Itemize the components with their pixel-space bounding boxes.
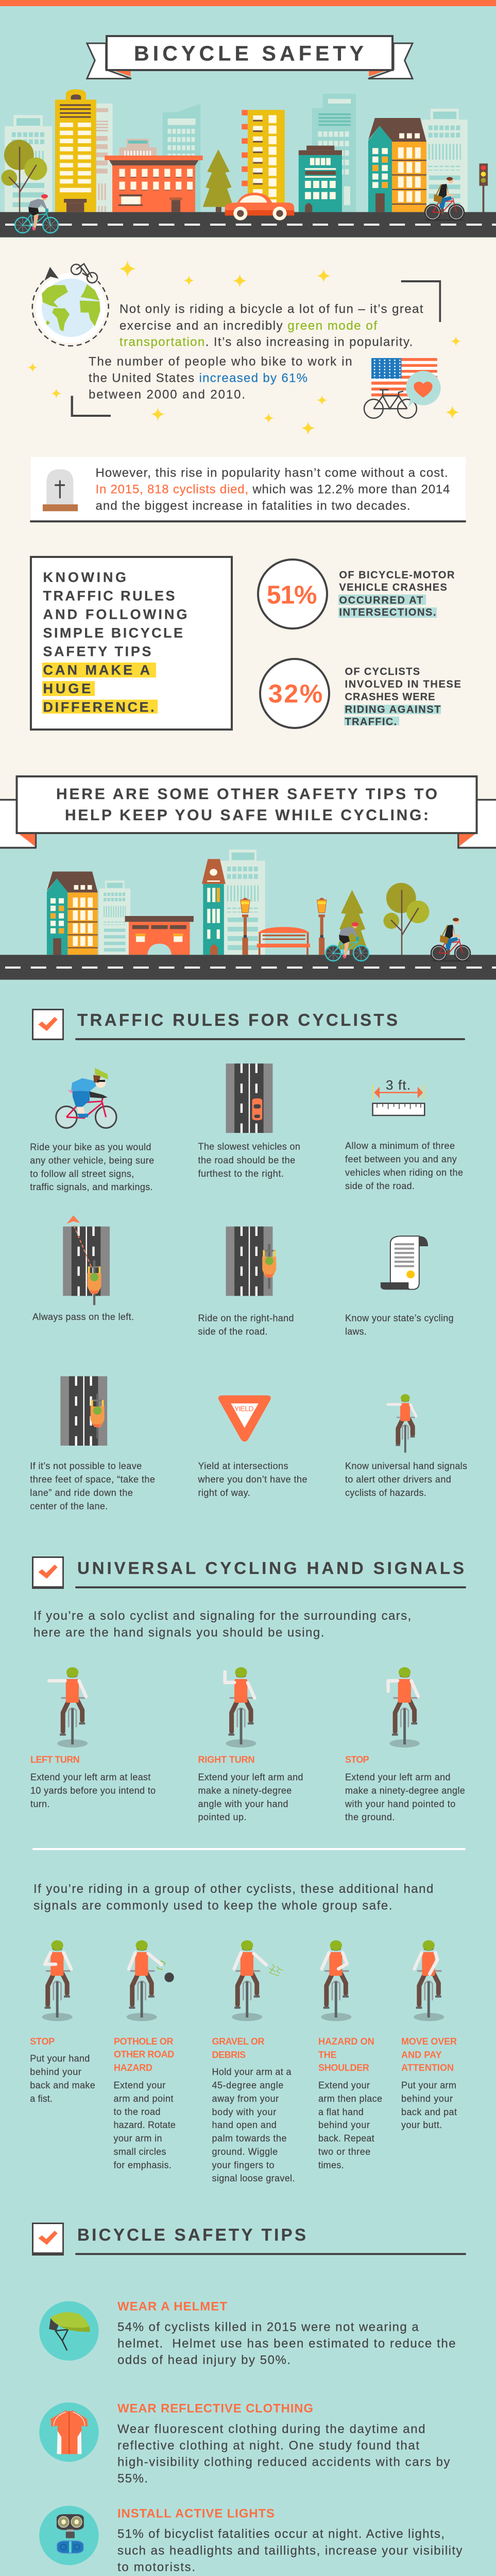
group signal: pothole: small circles [113,2147,166,2157]
bench [257,927,310,955]
group signal: gravel: away from your [212,2094,279,2104]
tip text [117,2507,463,2574]
building: teal with brown top [299,146,342,212]
figure: move over [414,1940,444,2021]
fatalities text: and the biggest increase in fatalities in two decades. [96,499,410,513]
signal: left turn text: turn. [30,1799,49,1809]
fatalities text: However, this rise in popularity hasn’t come without a cost. [96,466,448,480]
group signal: move over: AND PAY [401,2049,442,2060]
section heading [32,2223,466,2256]
highlight [338,595,437,618]
rule text row one: traffic signals, and markings. [30,1182,153,1192]
group signal: gravel: 45-degree angle [212,2080,283,2091]
statement text: DIFFERENCE. [43,699,155,715]
rule text row three: cyclists of hazards. [345,1488,426,1498]
rule text row three: If it’s not possible to leave [30,1461,142,1471]
stat caption: VEHICLE CRASHES [339,582,447,593]
group signal: move over: Put your arm [401,2080,456,2091]
tree: left [1,140,47,212]
group signal: gravel: hand open and [212,2120,277,2130]
ribbon tails [87,43,413,79]
signal: stop text: the ground. [345,1812,395,1822]
tip: helmet [39,2299,456,2367]
sparkles [27,260,461,435]
group signal: hazard on the shoulder [318,2036,382,2171]
highlight [344,705,441,725]
group signal: gravel: GRAVEL OR [212,2036,265,2046]
highlight bars [42,663,158,714]
figure: pothole [127,1940,174,2021]
road [0,955,496,980]
tip text: helmet. Helmet use has been estimated to reduce the [117,2337,456,2351]
rule text row one: feet between you and any [345,1154,457,1164]
icon: yield sign [218,1395,271,1442]
cyclist: red bike [424,177,465,221]
building: teal and orange house [368,118,426,212]
icon: riding on right-hand side [226,1227,276,1296]
rule text row three: Yield at intersections [198,1461,288,1471]
group signal: pothole: hazard. Rotate [113,2120,176,2130]
group signal: pothole: your arm in [113,2133,162,2144]
group signal: stop: behind your [30,2067,81,2077]
stat caption [339,569,455,618]
signal: stop text: make a ninety-degree angle [345,1786,465,1796]
signal: right turn text [198,1755,303,1822]
figure: stop [388,1667,420,1748]
rule text row two: Ride on the right-hand [198,1313,294,1324]
group signal: pothole [113,2036,176,2171]
intro panel [27,260,461,435]
label: three feet: 3 ft. [386,1077,411,1093]
signal: left turn text: LEFT TURN [30,1755,80,1765]
street lamp [317,897,327,955]
building: clock tower [202,859,226,955]
yield sign label: YIELD [234,1404,253,1413]
tip text: reflective clothing at night. One study found that [117,2439,419,2453]
building: pink rooftop [119,139,157,156]
group signal figures [42,1940,444,2021]
road [0,212,496,238]
group signal: pothole: HAZARD [114,2063,152,2073]
building: orange brick [105,156,203,212]
group signal: hazard on the shoulder: arm then place [318,2094,382,2104]
tip text: Wear fluorescent clothing during the daytime and [117,2422,425,2436]
group signal: move over: MOVE OVER [401,2036,457,2046]
signal: right turn text: RIGHT TURN [198,1755,254,1765]
icon: hand signal [388,1394,416,1453]
group signal: stop: back and make [30,2080,95,2091]
icon: taking the lane [60,1376,107,1446]
group signal: stop: STOP [30,2036,55,2046]
rule text row one: The slowest vehicles on [198,1142,300,1152]
rule text row three: where you don’t have the [198,1475,307,1485]
group signal: pothole: arm and point [113,2094,173,2104]
section heading: TRAFFIC RULES FOR CYCLISTS [77,1010,398,1029]
tip text: to motorists. [117,2560,195,2574]
stat: 51 percent [258,560,455,629]
rule text row two: Know your state’s cycling [345,1313,454,1324]
signal: stop text: STOP [345,1755,369,1765]
tip text: 55%. [117,2472,148,2486]
stat caption: OF BICYCLE-MOTOR [339,569,455,581]
building: teal tall back [312,94,356,212]
section heading: BICYCLE SAFETY TIPS [77,2225,306,2244]
stat caption: OF CYCLISTS [345,666,420,677]
stat circle [258,560,327,629]
statement text: SIMPLE BICYCLE [43,625,183,640]
rule text row two: Always pass on the left. [32,1312,134,1322]
rule text row one: any other vehicle, being sure [30,1155,154,1165]
rule text row one: Ride your bike as you would [30,1142,151,1152]
group signal: move over: your butt. [401,2120,442,2130]
rule icons row one [56,1063,428,1305]
statement text: CAN MAKE A [43,663,150,678]
group signal: hazard on the shoulder: times. [318,2160,344,2171]
building: pale right tower [422,109,468,212]
building: pale left tower [5,115,52,212]
car [225,193,294,221]
icon: three feet ruler [373,1084,424,1115]
figure: stop [42,1940,73,2021]
corner brackets [71,280,441,417]
section: traffic rules for cyclists [30,1009,467,1512]
intro text: the United States increased by 61% [89,371,307,385]
signal: left turn text [30,1755,156,1809]
signal: stop text [345,1755,465,1822]
figure: right turn [225,1667,256,1748]
stat caption: RIDING AGAINST [345,704,441,715]
tree: right [383,883,429,955]
icon: globe with bicycle orbit [32,262,109,346]
building: pale tower behind yellow [96,104,113,212]
rule text row two: laws. [345,1327,367,1337]
building: tall yellow tower [55,89,96,212]
ribbon tails [0,799,496,849]
signal: right turn text: make a ninety-degree [198,1786,292,1796]
rule text row three [30,1461,467,1512]
rule text row one: to follow all street signs, [30,1168,134,1179]
group signal: stop [30,2036,95,2104]
banner heading [56,786,437,824]
rule text row three: three feet of space, “take the [30,1475,155,1485]
stat caption: OCCURRED AT [339,595,423,606]
group intro: If you’re riding in a group of other cyclists, these additional hand [33,1882,433,1896]
icon: bike lights [39,2506,99,2565]
group signal: hazard on the shoulder: Extend your [318,2080,370,2091]
tip text: INSTALL ACTIVE LIGHTS [117,2507,275,2521]
fatalities text [96,466,450,513]
group signal: move over: behind your [401,2094,453,2104]
signal: right turn text: angle with your hand [198,1799,288,1809]
hero city skyline [0,89,496,238]
icon: road with car on the right [226,1063,272,1133]
tree: pine [337,890,367,955]
rule text row three: to alert other drivers and [345,1475,451,1485]
group signal: gravel: body with your [212,2107,276,2117]
section heading [32,1009,465,1040]
group signal: hazard on the shoulder: THE [318,2049,337,2060]
tip text: 51% of bicyclist fatalities occur at night. Active lights, [117,2527,444,2541]
rule text row three: lane” and ride down the [30,1488,133,1498]
group signal: hazard on the shoulder: two or three [318,2147,370,2157]
statement text: HUGE [43,681,91,697]
banner heading: HELP KEEP YOU SAFE WHILE CYCLING: [65,807,429,824]
rule text row one: furthest to the right. [198,1168,284,1179]
group intro: signals are commonly used to keep the whole group safe. [33,1899,392,1912]
solo signal figures [49,1667,420,1748]
icon: passing on the left [63,1215,110,1305]
section: bicycle safety tips [32,2223,466,2574]
group signal: pothole: Extend your [113,2080,165,2091]
stat: 32 percent [260,659,461,728]
stat circle [260,659,329,728]
figure: hazard on the shoulder [321,1940,351,2021]
rule text row one: Allow a minimum of three [345,1141,455,1151]
cyclist: teal bike [15,194,58,233]
street lamp [241,897,250,955]
building: yellow mid tower [242,110,285,212]
intro text: The number of people who bike to work in [89,354,352,368]
group signal: hazard on the shoulder: behind your [318,2120,370,2130]
group signal: hazard on the shoulder: SHOULDER [318,2063,369,2073]
statement text [43,569,187,715]
stat value: 51% [267,580,317,609]
cyclist: teal bike [326,922,369,961]
stat value: 32% [268,679,322,708]
second ribbon banner [0,776,496,849]
signal: stop text: Extend your left arm and [345,1772,450,1783]
group signal: move over: back and pat [401,2107,457,2117]
tip text: odds of head injury by 50%. [117,2353,290,2367]
intro text: between 2000 and 2010. [89,387,245,401]
group signal: hazard on the shoulder: a flat hand [318,2107,364,2117]
group signal: gravel: signal loose gravel. [212,2173,295,2183]
group signal: pothole: POTHOLE OR [114,2036,173,2046]
group signal: pothole: OTHER ROAD [114,2049,174,2060]
tip text: high-visibility clothing reduced accidents with cars by [117,2455,450,2469]
statement text: TRAFFIC RULES [43,588,175,603]
building: tall pale tower [220,850,265,955]
rule icons row three [60,1376,416,1453]
group signal: gravel: your fingers to [212,2160,274,2171]
rule text row two [32,1312,454,1337]
icon: flag with bike and heart [364,358,441,418]
rule text row three: right of way. [198,1488,250,1498]
title: BICYCLE SAFETY [134,41,364,65]
rule text row three: center of the lane. [30,1501,108,1512]
solo intro: here are the hand signals you should be using. [33,1626,324,1640]
group signal: move over [401,2036,457,2130]
intro text: transportation. It’s also increasing in popularity. [119,335,413,349]
signal: left turn text: 10 yards before you intend to [30,1786,156,1796]
top orange band [0,0,496,6]
building: teal back tower [163,104,200,212]
traffic light [480,163,488,217]
stat caption [345,666,461,728]
group signal: pothole: to the road [113,2107,161,2117]
icon: law scroll [381,1236,428,1290]
signal: right turn text: Extend your left arm and [198,1772,303,1783]
tip: reflective clothing [39,2401,450,2486]
banner heading: HERE ARE SOME OTHER SAFETY TIPS TO [56,786,437,803]
building: teal and orange house [47,872,98,955]
tip text: 54% of cyclists killed in 2015 were not wearing a [117,2320,419,2334]
title ribbon [87,36,413,79]
tip text: WEAR A HELMET [117,2299,227,2313]
group signal: pothole: for emphasis. [113,2160,172,2171]
section: universal cycling hand signals [30,1556,466,2183]
section heading: UNIVERSAL CYCLING HAND SIGNALS [77,1558,464,1578]
group intro [33,1882,433,1912]
panel: fatalities [30,457,466,522]
figure: left turn [49,1667,88,1748]
intro text [89,302,423,401]
intro text: Not only is riding a bicycle a lot of fun – it’s great [119,302,423,316]
building: orange arch [125,916,194,955]
group signal: stop: Put your hand [30,2054,90,2064]
road dashes [5,967,496,969]
statement text: AND FOLLOWING [43,606,187,622]
group signal: gravel [212,2036,295,2183]
rule text row one: the road should be the [198,1155,295,1165]
icon: helmet [39,2301,99,2361]
tip text [117,2401,450,2486]
group signal: gravel: ground. Wiggle [212,2147,278,2157]
tree: pine [203,149,233,212]
section heading [32,1556,466,1589]
tip text: such as headlights and taillights, increase your visibility [117,2544,463,2557]
icon: tombstone [43,469,78,511]
rule text row one: vehicles when riding on the [345,1167,463,1178]
ribbon body [16,776,477,833]
icon: jersey [39,2402,99,2462]
intro text: exercise and an incredibly green mode of [119,319,377,333]
road dashes [5,224,496,226]
rule text row two: side of the road. [198,1327,268,1337]
icon: cyclist in blue [56,1068,116,1128]
fatalities text: In 2015, 818 cyclists died, which was 12.2% more than 2014 [96,483,450,497]
group signal: stop: a fist. [30,2094,53,2104]
stat caption: INVOLVED IN THESE [345,679,461,690]
stat caption: CRASHES WERE [345,691,435,703]
group signal: gravel: DEBRIS [212,2049,246,2060]
tip: active lights [39,2506,463,2574]
stat caption: INTERSECTIONS. [339,607,436,618]
figure: gravel [232,1940,283,2021]
rule text row one: side of the road. [345,1181,415,1191]
ribbon body [107,36,392,70]
cyclist: red bike [430,918,471,961]
group signal: move over: ATTENTION [401,2063,454,2073]
panel: knowing traffic rules [31,557,232,730]
signal: right turn text: pointed up. [198,1812,246,1822]
group signal: hazard on the shoulder: HAZARD ON [318,2036,374,2046]
stat caption: TRAFFIC. [345,717,397,728]
second city scene [0,850,496,980]
group signal: gravel: Hold your arm at a [212,2067,292,2077]
white divider [32,1848,466,1850]
rule text row three: Know universal hand signals [345,1461,467,1471]
signal: left turn text: Extend your left arm at least [30,1772,150,1783]
signal: stop text: with your hand pointed to [345,1799,455,1809]
statement text: KNOWING [43,569,126,585]
rule text row one [30,1141,463,1192]
solo intro [33,1609,411,1640]
tip text [117,2299,456,2367]
statement text: SAFETY TIPS [43,644,151,659]
building: small pale tower [99,880,130,955]
group signal: hazard on the shoulder: back. Repeat [318,2133,374,2144]
solo intro: If you’re a solo cyclist and signaling for the surrounding cars, [33,1609,411,1623]
group signal: gravel: palm towards the [212,2133,286,2144]
tip text: WEAR REFLECTIVE CLOTHING [117,2401,313,2415]
